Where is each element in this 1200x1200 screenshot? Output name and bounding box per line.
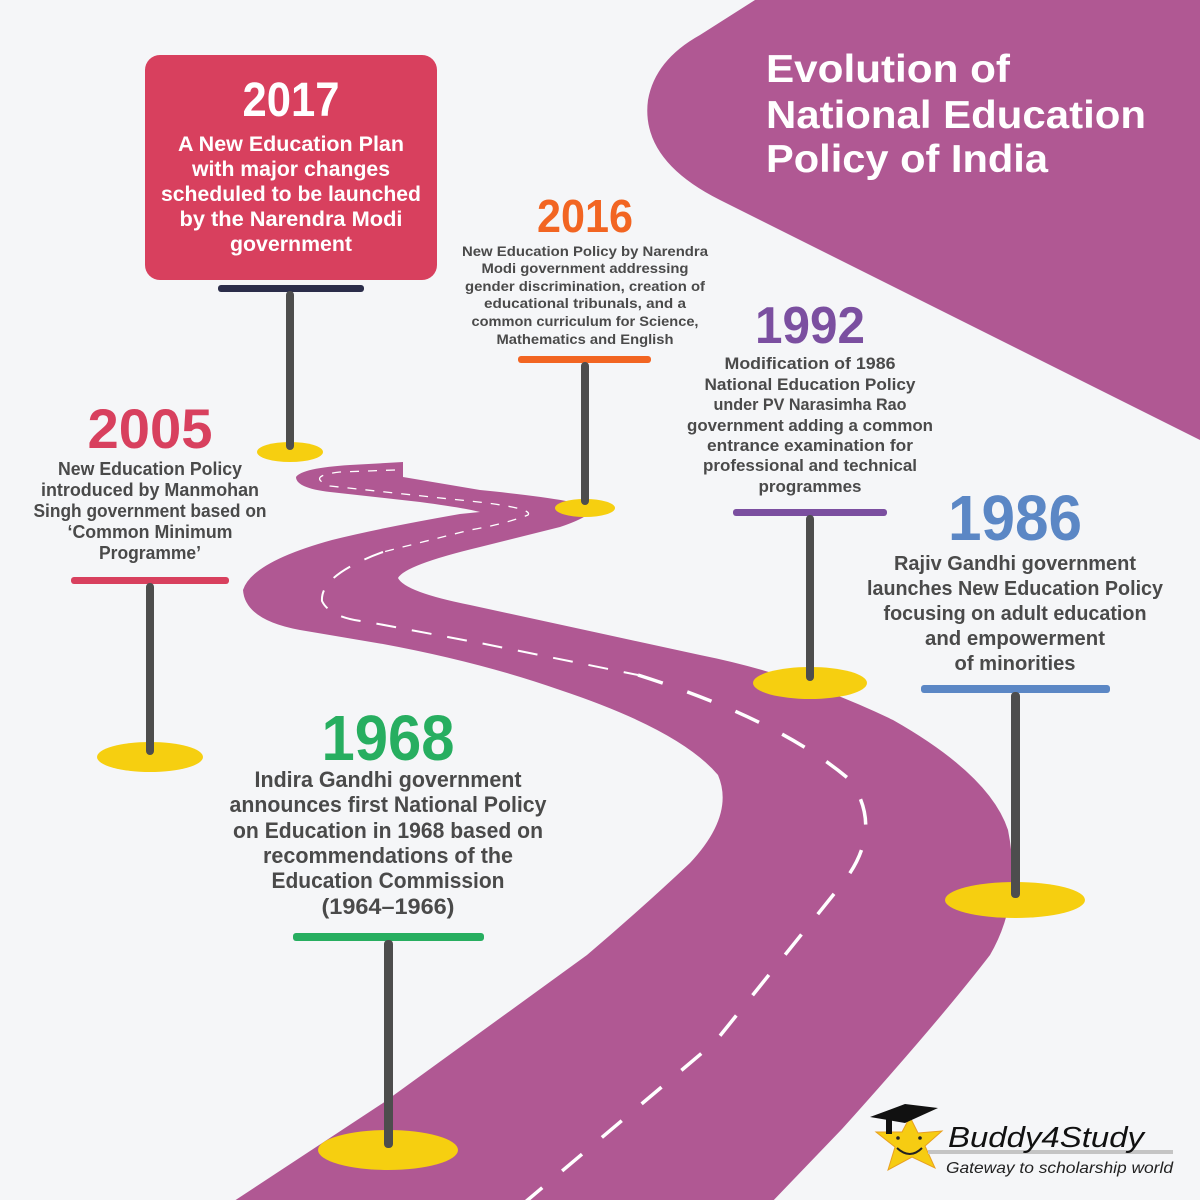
sign box 2017: 2017 [242,74,340,127]
milestone 2016: 2016 [537,190,633,242]
sign box 2017: by the Narendra Modi [180,208,402,231]
milestone 1992: 1992 [755,297,865,355]
milestone 1992: entrance examination for [707,436,913,455]
milestone 1986 [867,482,1164,918]
milestone 1992: government adding a common [687,416,933,435]
milestone 2016: Mathematics and English [496,331,674,347]
milestone 2016 [462,190,708,517]
milestone 1986: Rajiv Gandhi government [894,553,1136,575]
milestone 1992: under PV Narasimha Rao [714,395,906,414]
title [766,48,1146,181]
title: National Education [766,94,1146,137]
milestone 1992: professional and technical [703,456,917,475]
milestone 1968: (1964–1966) [322,894,454,919]
milestone 2005: 2005 [88,397,212,460]
milestone 2005: Singh government based on [34,501,266,521]
milestone 1968: Education Commission [272,868,504,893]
milestone 2016: gender discrimination, creation of [465,278,705,294]
milestone 1968: Indira Gandhi government [254,767,522,792]
milestone 1992: programmes [758,477,862,496]
milestone 1986: focusing on adult education [884,603,1146,625]
icon: star with cap [870,1104,942,1170]
milestone 1968: 1968 [322,702,454,774]
milestone 1986: launches New Education Policy [867,578,1164,600]
milestone 2016: Modi government addressing [482,260,688,276]
milestone 1986: of minorities [954,653,1076,675]
milestone 2005: introduced by Manmohan [41,480,259,500]
milestone 1992 [687,297,933,699]
milestone 2016: common curriculum for Science, [472,313,698,329]
milestone 2005: New Education Policy [58,459,242,479]
milestone 1986: and empowerment [925,628,1105,650]
sign box 2017 [145,55,437,280]
logo [870,1104,1174,1177]
milestone 1968 [230,702,547,1170]
sign box 2017: government [230,233,352,256]
title banner [647,0,1200,440]
logo: Buddy4Study [948,1122,1146,1154]
title: Evolution of [766,48,1011,91]
title: Policy of India [766,138,1048,181]
milestone 1992: National Education Policy [704,375,916,394]
sign box 2017: A New Education Plan [178,133,404,156]
milestone 2016: New Education Policy by Narendra [462,243,708,259]
milestone 2005: Programme’ [99,543,201,563]
sign box 2017: with major changes [191,158,390,181]
milestone 1992: Modification of 1986 [724,354,896,373]
milestone 1968: recommendations of the [263,843,513,868]
sign box 2017: scheduled to be launched [161,183,421,206]
milestone 1968: announces first National Policy [230,792,547,817]
milestone 2016: educational tribunals, and a [484,295,686,311]
milestone 2017 [145,55,437,462]
milestone 2005 [34,397,266,772]
logo: Gateway to scholarship world [946,1160,1174,1177]
milestone 1986: 1986 [948,482,1082,554]
road [190,462,1012,1200]
milestone 2005: ‘Common Minimum [68,522,232,542]
milestone 1968: on Education in 1968 based on [233,818,543,843]
